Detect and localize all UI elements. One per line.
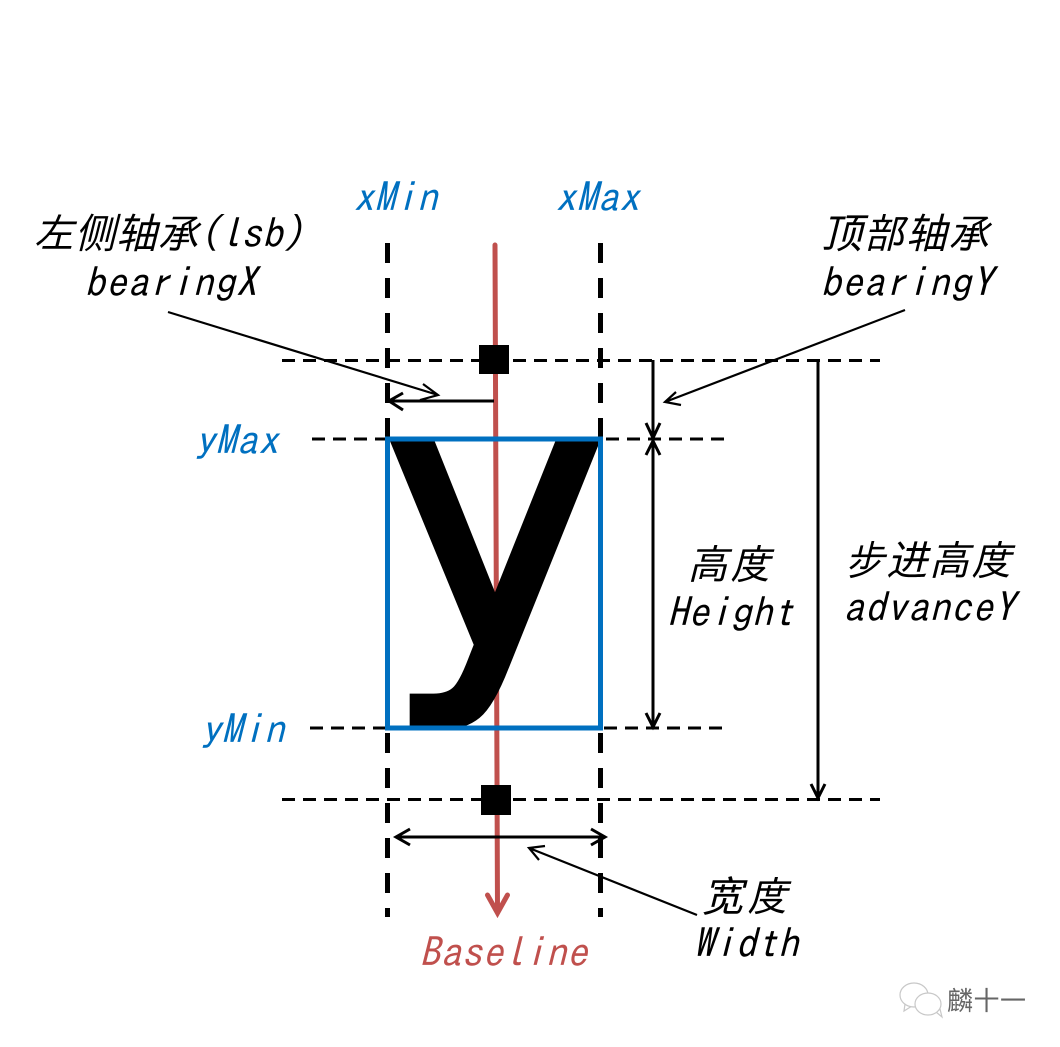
- arrow: bearingX: [389, 393, 494, 410]
- label: advance height: advanceY: [843, 586, 1020, 627]
- bounding box: [388, 439, 600, 728]
- icon: chat bubbles: [900, 983, 942, 1017]
- label: height: 高度: [687, 543, 775, 584]
- label: left bearing: [33, 212, 304, 302]
- label: xMin: xMin: [353, 176, 440, 217]
- leader: width: [529, 846, 697, 915]
- watermark: [900, 981, 1026, 1018]
- label: width: Width: [693, 922, 800, 963]
- guide lines: [282, 243, 880, 917]
- arrow: bearingY: [646, 360, 660, 438]
- label: top bearing: [820, 212, 998, 302]
- label: height: Height: [667, 591, 794, 632]
- label: baseline: Baseline: [419, 931, 590, 972]
- label: top bearing: bearingY: [820, 261, 998, 302]
- label: yMax: yMax: [194, 419, 280, 460]
- glyph y: y: [384, 301, 606, 737]
- leader: bearingY: [665, 310, 905, 405]
- baseline arrow: [488, 245, 508, 913]
- leader: bearingX: [168, 312, 438, 400]
- bottom origin marker: [481, 785, 511, 815]
- arrow: height: [646, 441, 660, 727]
- label: width: [693, 875, 800, 963]
- top origin marker: [479, 345, 509, 374]
- label: advance height: [843, 539, 1020, 627]
- label: top bearing: 顶部轴承: [821, 212, 993, 253]
- watermark name: 麟十一: [947, 981, 1026, 1018]
- arrow: advanceY: [811, 360, 825, 798]
- label: xMax: xMax: [555, 176, 642, 217]
- label: yMin: yMin: [200, 708, 286, 749]
- arrow: width: [396, 829, 605, 845]
- label: left bearing: bearingX: [84, 261, 262, 302]
- label: left bearing: 左侧轴承(lsb): [33, 212, 304, 253]
- label: height: [667, 543, 794, 632]
- label: width: 宽度: [702, 875, 792, 916]
- label: advance height: 步进高度: [844, 539, 1016, 580]
